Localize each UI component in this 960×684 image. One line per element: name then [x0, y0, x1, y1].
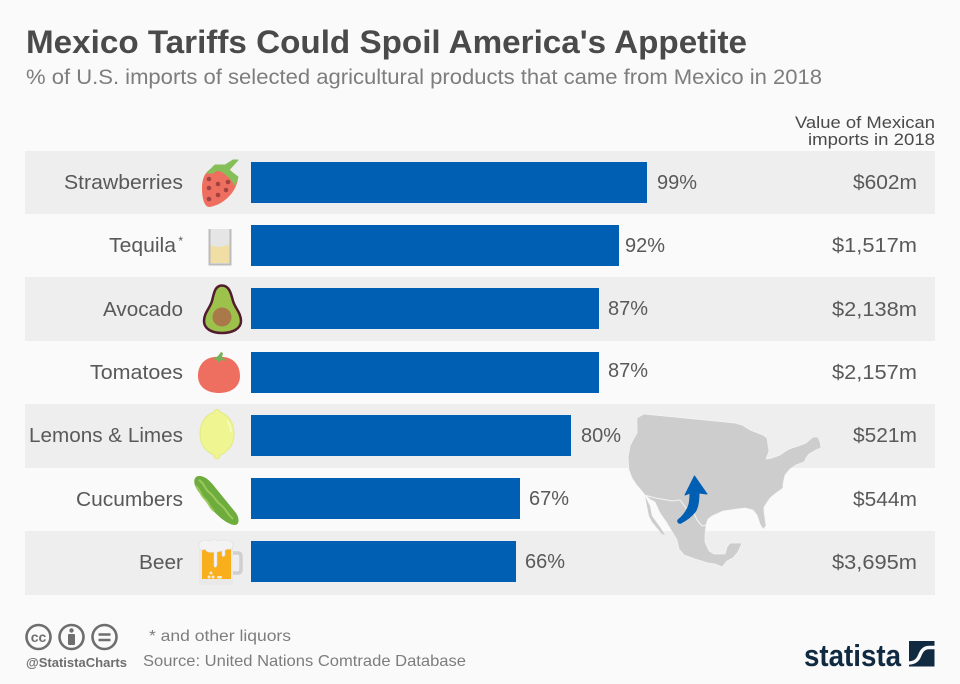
subtitle: % of U.S. imports of selected agricultural products that came from Mexico in 2018 [26, 65, 822, 89]
arrow: from Mexico to USA [678, 476, 707, 523]
percentage labels: 80% [581, 425, 621, 447]
import values: $521m [853, 425, 917, 447]
import values: $1,517m [832, 235, 917, 257]
percentage labels: 92% [625, 235, 665, 257]
icon: cucumber [194, 476, 239, 525]
product labels: Cucumbers [76, 489, 183, 511]
icon: avocado [204, 286, 241, 333]
product labels: Lemons & Limes [29, 425, 183, 447]
product labels: * [178, 234, 183, 248]
product labels: Tequila [109, 235, 177, 257]
import values: $2,157m [832, 362, 917, 384]
icon: tomato [198, 352, 240, 393]
icon: strawberry [202, 160, 238, 207]
import values: $2,138m [832, 299, 917, 321]
product labels [29, 172, 183, 574]
footnote: * and other liquors [149, 628, 291, 645]
percentage labels: 87% [608, 298, 648, 320]
map: USA and Mexico [628, 414, 821, 567]
row backgrounds [25, 151, 935, 595]
icon: tequila glass [209, 229, 231, 265]
handle: StatistaCharts: @StatistaCharts [26, 656, 127, 670]
source: Source: United Nations Comtrade Database [143, 653, 466, 670]
icon: lemon [200, 410, 234, 459]
column heading: value of imports: imports in 2018 [808, 131, 935, 149]
percentage labels [525, 172, 697, 573]
percentage labels: 66% [525, 551, 565, 573]
title: Mexico Tariffs Could Spoil America's Appetite [26, 24, 747, 60]
import values [832, 172, 917, 574]
percentage labels: 99% [657, 172, 697, 194]
product labels: Avocado [103, 299, 183, 321]
logo: statista: statista [804, 638, 902, 673]
column heading: value of imports [795, 114, 935, 149]
icon: beer mug [199, 540, 241, 585]
product labels: Tomatoes [90, 362, 183, 384]
import values: $544m [853, 489, 917, 511]
import values: $3,695m [832, 552, 917, 574]
import values: $602m [853, 172, 917, 194]
percentage labels: 67% [529, 488, 569, 510]
product labels: Beer [139, 552, 183, 574]
bar chart [251, 162, 647, 582]
column heading: value of imports: Value of Mexican [795, 114, 935, 132]
product labels: Strawberries [64, 172, 183, 194]
percentage labels: 87% [608, 360, 648, 382]
icon: creative commons licence [26, 625, 116, 649]
icon: creative commons licence: cc [31, 629, 46, 645]
